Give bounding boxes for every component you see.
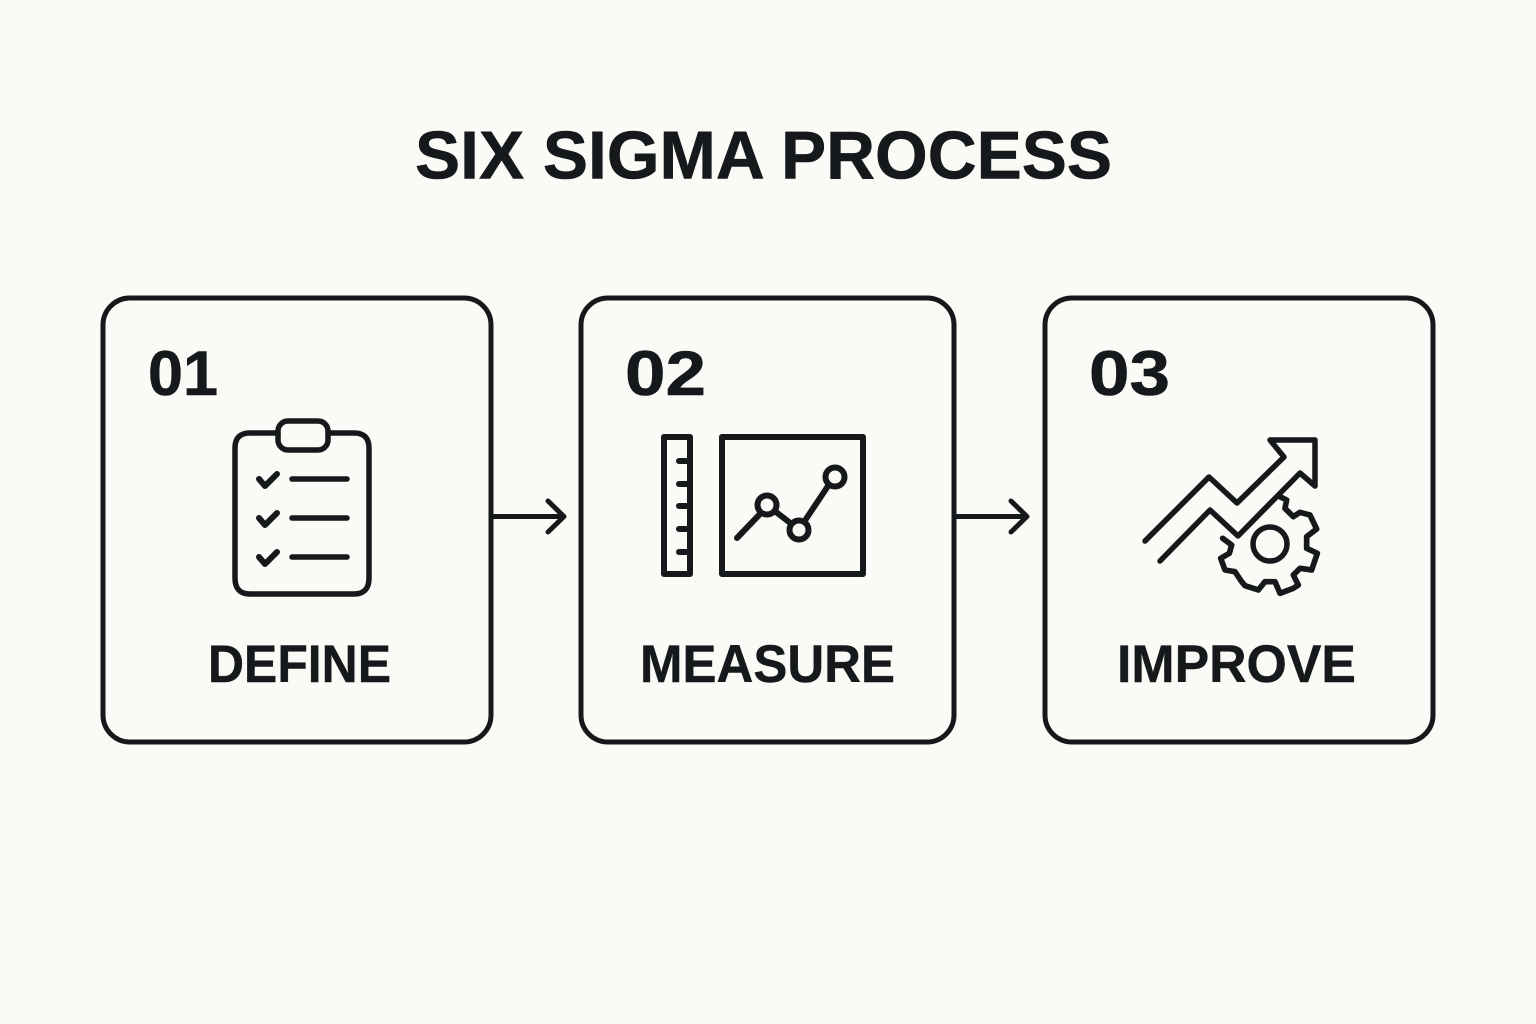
panel frame: measure <box>581 298 954 742</box>
label: measure: MEASURE <box>640 635 895 694</box>
panel: define <box>103 298 491 742</box>
panel: measure <box>581 298 954 742</box>
icon: ruler and line chart <box>664 437 863 574</box>
label: improve: IMPROVE <box>1117 635 1356 694</box>
label: define: DEFINE <box>208 635 391 694</box>
title: SIX SIGMA PROCESS <box>415 118 1112 194</box>
step number 02: 02 <box>625 339 706 409</box>
icon: rising arrow with gear <box>1145 440 1317 593</box>
panel frame: improve <box>1045 298 1433 742</box>
arrow: define to measure <box>494 501 564 532</box>
icon: clipboard checklist <box>235 421 369 594</box>
panel: improve <box>1045 298 1433 742</box>
step number 03: 03 <box>1089 339 1170 409</box>
arrow: measure to improve <box>957 501 1027 532</box>
step number 01: 01 <box>148 339 218 409</box>
panel frame: define <box>103 298 491 742</box>
